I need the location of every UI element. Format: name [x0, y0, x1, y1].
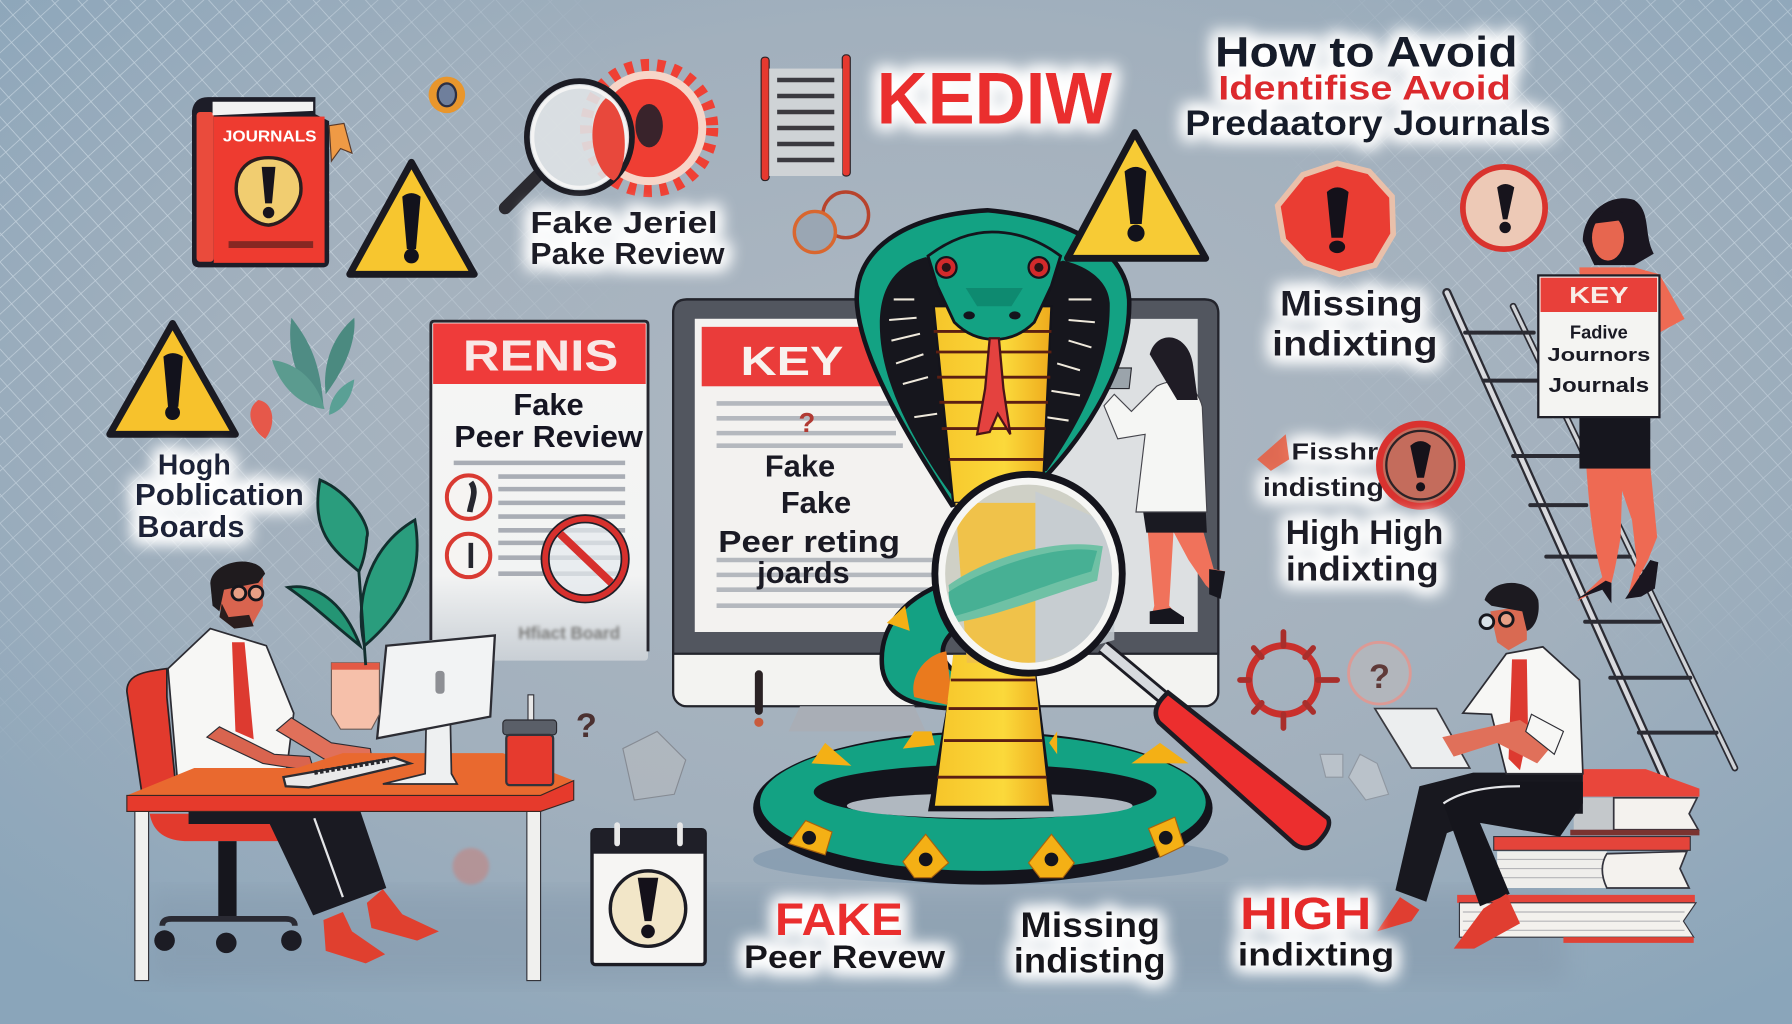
- shirt: [168, 629, 294, 777]
- text: high indexing: indixting: [1286, 551, 1439, 589]
- computer: [283, 635, 495, 787]
- sign: Journals: [1549, 374, 1649, 397]
- monitor text: Fake: [781, 485, 851, 520]
- text: high indexing: [1286, 514, 1443, 589]
- monitor heading: KEY: [741, 338, 843, 384]
- icon: faded question mark: [1349, 642, 1410, 704]
- title: How to Avoid: [1215, 28, 1518, 75]
- panel: fake peer review card: Peer Review: [454, 419, 644, 454]
- text: missing indexing: Missing: [1280, 283, 1423, 323]
- text: fake peer review bottom: Peer Revew: [744, 939, 945, 975]
- shirt: [1463, 647, 1583, 774]
- panel: fake peer review card: [431, 321, 648, 661]
- person: woman in lab coat: [1091, 337, 1225, 624]
- front leg: [1443, 782, 1583, 906]
- text: high indexing: High High: [1286, 514, 1443, 552]
- tablet: [1375, 709, 1470, 768]
- monitor text: [718, 449, 900, 590]
- icon: red swirl: [1257, 434, 1289, 471]
- text: fissh indexing: indisting: [1263, 472, 1384, 502]
- decorative question mark: ?: [576, 707, 597, 745]
- icon: ladder: [1447, 293, 1735, 782]
- monitor text: Peer reting: [718, 524, 900, 559]
- icon: small orange badge: [429, 77, 465, 113]
- stack of books: [1457, 769, 1699, 943]
- arm: [207, 727, 314, 771]
- text: high indexing bottom: HIGH: [1240, 888, 1371, 939]
- icon: magnifier and red seal: [505, 65, 712, 208]
- text: high publication boards: Boards: [137, 509, 245, 544]
- sign: Fadive: [1570, 321, 1628, 342]
- illustration: cobra: [753, 210, 1229, 885]
- icon: red gear ring: [1240, 632, 1337, 728]
- panel: central monitor: ?: [798, 407, 815, 438]
- head: [215, 577, 263, 626]
- decorative rubble: [1320, 754, 1389, 800]
- red chair: [127, 669, 302, 953]
- text: missing indexing bottom: [1014, 905, 1166, 981]
- trousers: [189, 800, 386, 915]
- icon: magnifying glass over snake: [937, 477, 1329, 848]
- red cup: [503, 695, 557, 785]
- text: missing indexing: [1272, 283, 1438, 363]
- back leg: [1395, 773, 1583, 902]
- sign: KEY: [1569, 282, 1629, 308]
- panel: fake peer review card: Fake: [513, 387, 584, 422]
- icon: journals book: JOURNALS: [223, 129, 317, 146]
- icon: red octagon alert: [1278, 163, 1393, 274]
- text: fake peer review bottom: [744, 894, 945, 975]
- text: missing indexing bottom: indisting: [1014, 941, 1166, 981]
- cobra coil: [882, 578, 962, 709]
- text: high publication boards: [135, 449, 304, 544]
- cobra lower neck: [928, 655, 1054, 811]
- text: high publication boards: Hogh: [158, 449, 231, 481]
- card heading: RENIS: [463, 332, 618, 380]
- sign: [1538, 275, 1659, 417]
- icon: warning triangle center: [1067, 133, 1206, 258]
- text: fake journal label: Fake Jeriel: [530, 205, 718, 240]
- text: missing indexing: indixting: [1272, 323, 1438, 363]
- cobra ring body: [753, 731, 1229, 885]
- text: fissh indexing: [1263, 438, 1384, 502]
- person: man sitting on books: [1375, 583, 1699, 949]
- cobra hood: [857, 210, 1129, 505]
- monitor text: joards: [756, 555, 850, 590]
- icon: calendar alert: [592, 825, 705, 965]
- panel: central monitor: [673, 299, 1218, 731]
- icon: journals book: [192, 97, 352, 267]
- monitor text: Fake: [765, 449, 835, 484]
- text: fake peer review bottom: FAKE: [775, 894, 903, 945]
- person: man at desk: [127, 561, 574, 981]
- decorative rubble near desk: [453, 731, 686, 885]
- cobra tongue: [977, 338, 1010, 434]
- cobra head: [928, 232, 1061, 339]
- text: missing indexing bottom: Missing: [1021, 905, 1160, 945]
- icon: small red mark: [250, 400, 272, 439]
- icon: faded question mark: ?: [1369, 658, 1390, 696]
- text: high indexing bottom: [1238, 888, 1394, 973]
- icon: warning triangle left: [110, 323, 235, 434]
- sign: Journors: [1547, 344, 1650, 365]
- decorative leaf icon: [272, 318, 355, 415]
- icon: round alert: [1463, 167, 1545, 249]
- icon: warning triangle top left: [350, 162, 474, 274]
- text: fake journal label: [530, 205, 726, 271]
- head: [1490, 606, 1527, 650]
- desk: [127, 753, 574, 981]
- title: Identifise Avoid: [1218, 69, 1511, 107]
- text: high publication boards: Poblication: [135, 477, 304, 512]
- text: high indexing bottom: indixting: [1238, 937, 1394, 973]
- person: woman holding sign: [1538, 198, 1685, 603]
- forearm: [1442, 720, 1554, 763]
- icon: potted plant: [288, 480, 417, 729]
- title: [1185, 28, 1551, 143]
- icon: red circle alert: [1379, 424, 1462, 506]
- icon: list ladder: [761, 55, 869, 253]
- cobra neck: [934, 306, 1051, 503]
- heading: KEDIW: KEDIW: [877, 58, 1112, 139]
- panel: fake peer review card: Hfiact Board: [518, 623, 620, 643]
- text: fissh indexing: Fisshr: [1291, 438, 1378, 464]
- text: fake journal label: Pake Review: [530, 236, 726, 271]
- title: Predaatory Journals: [1185, 103, 1551, 143]
